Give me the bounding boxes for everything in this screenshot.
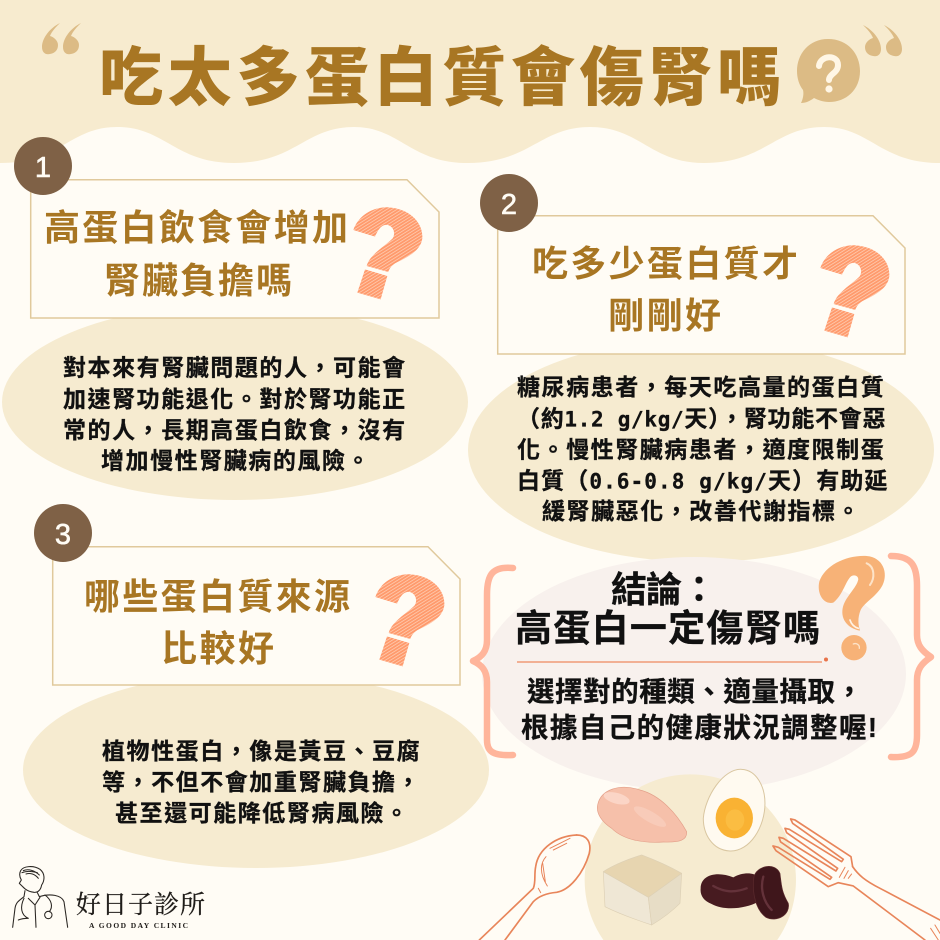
answer text 3: 植物性蛋白，像是黃豆、豆腐 <box>102 738 421 764</box>
answer text 2: （約1.2 g/kg/天），腎功能不會惡 <box>517 406 887 432</box>
answer ellipse 2 <box>468 338 934 562</box>
icon: boiled egg <box>703 769 765 851</box>
conclusion text: 選擇對的種類、適量攝取， <box>527 676 863 707</box>
answer text 1: 常的人，長期高蛋白飲食，沒有 <box>63 417 407 443</box>
icon: doctor line drawing <box>13 867 68 927</box>
clinic logo <box>13 867 205 930</box>
answer text 3: 等，不但不會加重腎臟負擔， <box>102 769 421 795</box>
clinic name: 好日子診所 <box>76 891 205 919</box>
answer text 1 <box>63 354 407 474</box>
heading 1 <box>44 207 348 301</box>
heading 1: 高蛋白飲食會增加 <box>44 207 348 248</box>
conclusion heading: 高蛋白一定傷腎嗎 <box>515 608 820 649</box>
number badge 1 <box>14 137 72 195</box>
heading 3: 哪些蛋白質來源 <box>84 576 350 617</box>
title: 吃太多蛋白質會傷腎嗎 <box>99 42 781 114</box>
conclusion ellipse <box>482 557 906 791</box>
panel: section 2 how much protein <box>468 174 934 562</box>
panel: section 3 protein sources <box>23 504 489 868</box>
answer text 2: 緩腎臟惡化，改善代謝指標。 <box>542 498 861 524</box>
icon: spoon outline <box>479 835 590 940</box>
conclusion heading <box>515 569 820 649</box>
icon: kidney beans <box>701 866 789 919</box>
icon: left quotation mark <box>42 23 81 54</box>
icon: fork outline <box>773 819 940 940</box>
icon: hatched question mark 1 <box>353 207 422 299</box>
number badge 3: 3 <box>55 519 71 551</box>
answer text 1: 加速腎功能退化。對於腎功能正 <box>63 386 407 412</box>
left brace <box>473 568 513 755</box>
heading 2 <box>532 243 798 336</box>
number badge 2 <box>480 174 538 232</box>
icon: right quotation mark <box>863 25 902 56</box>
conclusion text <box>521 676 877 743</box>
heading box 3 <box>53 547 460 685</box>
answer text 1: 對本來有腎臟問題的人，可能會 <box>63 354 407 380</box>
heading box 2 <box>498 216 905 354</box>
divider with dot <box>517 658 828 662</box>
icon: glossy orange question mark <box>819 556 885 660</box>
answer text 2 <box>517 374 889 524</box>
answer text 2: 糖尿病患者，每天吃高量的蛋白質 <box>517 374 885 400</box>
icon: hatched question mark 3 <box>375 574 444 666</box>
heading 2: 吃多少蛋白質才 <box>532 243 798 284</box>
answer text 2: 化。慢性腎臟病患者，適度限制蛋 <box>517 436 885 462</box>
number badge 2: 2 <box>501 189 517 221</box>
number badge 3 <box>34 504 92 562</box>
icon: tofu <box>603 855 682 925</box>
answer text 2: 白質（0.6-0.8 g/kg/天）有助延 <box>517 468 889 494</box>
heading 1: 腎臟負擔嗎 <box>104 260 292 301</box>
answer ellipse 3 <box>23 672 489 868</box>
icon: chicken breast <box>597 787 687 842</box>
icon: hatched question mark 2 <box>820 245 889 337</box>
answer text 3: 甚至還可能降低腎病風險。 <box>115 800 410 826</box>
heading box 1 <box>31 180 439 318</box>
answer text 1: 增加慢性腎臟病的風險。 <box>101 448 371 474</box>
conclusion heading: 結論： <box>611 569 717 610</box>
food illustration <box>479 769 940 940</box>
icon: question speech bubble <box>797 39 860 103</box>
header wave band <box>0 0 940 163</box>
panel: section 1 high protein diet <box>2 137 468 500</box>
heading 3: 比較好 <box>161 628 274 669</box>
heading 2: 剛剛好 <box>608 295 721 336</box>
heading 3 <box>84 576 350 669</box>
clinic english name: A GOOD DAY CLINIC <box>89 921 188 930</box>
answer ellipse 1 <box>2 304 468 500</box>
panel: conclusion <box>473 556 931 791</box>
right brace <box>891 556 931 757</box>
conclusion text: 根據自己的健康狀況調整喔! <box>521 712 877 743</box>
number badge 1: 1 <box>35 152 51 184</box>
answer text 3 <box>102 738 421 826</box>
plate circle <box>585 774 796 940</box>
